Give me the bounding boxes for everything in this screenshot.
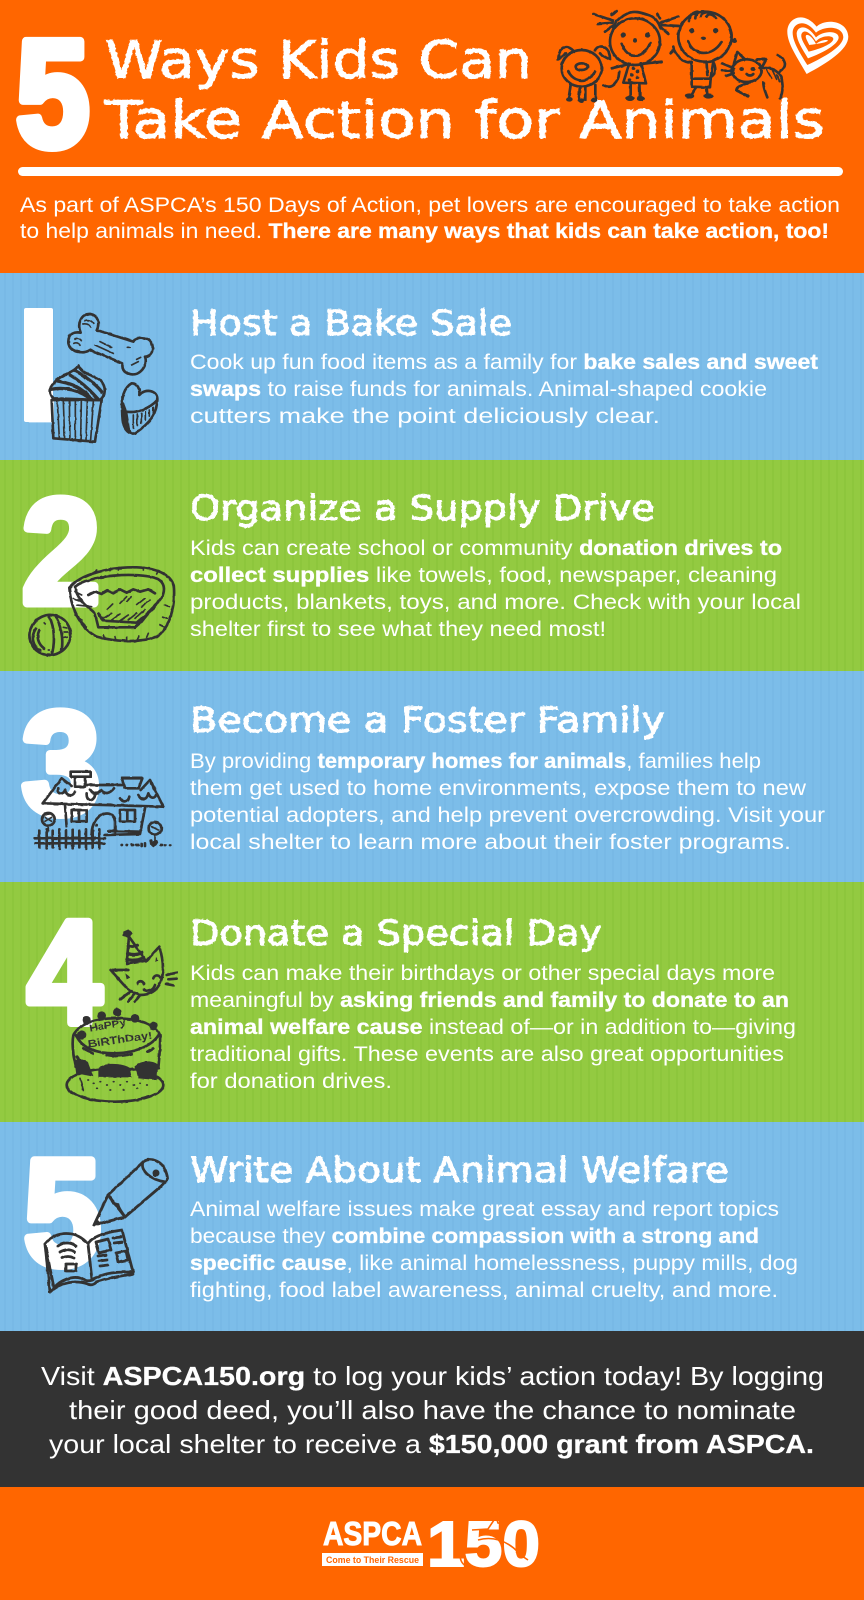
intro text <box>20 194 840 243</box>
body text: animal welfare cause instead of—or in addition to—giving <box>190 1015 796 1039</box>
body text <box>190 961 796 1093</box>
body text: cutters make the point deliciously clear. <box>190 404 660 428</box>
panel: call to action <box>0 1331 864 1487</box>
big number 5: 5 <box>16 9 89 179</box>
body text: swaps to raise funds for animals. Animal-shaped cookie <box>190 377 767 401</box>
dog bed <box>69 567 174 641</box>
body text: local shelter to learn more about their foster programs. <box>190 830 791 854</box>
call to action text: their good deed, you’ll also have the chance to nominate <box>69 1395 796 1425</box>
ball <box>23 608 77 662</box>
logo: ASPCA: Come to Their Rescue <box>326 1555 419 1566</box>
call to action text: your local shelter to receive a $150,000 grant from ASPCA. <box>49 1429 814 1459</box>
bone <box>68 314 153 374</box>
logo: ASPCA: ASPCA <box>323 1515 422 1552</box>
girl <box>593 11 679 101</box>
illustration: kids with pets <box>558 11 785 103</box>
heading: Organize a Supply Drive <box>190 489 655 529</box>
body text: potential adopters, and help prevent overcrowding. Visit your <box>190 803 825 827</box>
logo: 150: 150 <box>427 1508 540 1580</box>
intro text: As part of ASPCA’s 150 Days of Action, pet lovers are encouraged to take action <box>20 194 840 217</box>
cake: HaPPy <box>89 1017 127 1035</box>
panel: host a bake sale <box>0 273 864 460</box>
body text: Kids can make their birthdays or other special days more <box>190 961 775 985</box>
title: Take Action for Animals <box>104 91 825 151</box>
heading: Donate a Special Day <box>190 914 602 954</box>
icon: pencil <box>92 1160 168 1226</box>
body text: fighting, food label awareness, animal cruelty, and more. <box>190 1278 778 1302</box>
panel: organize a supply drive <box>0 460 864 671</box>
number 2: 2 <box>22 468 100 635</box>
body text: them get used to home environments, expose them to new <box>190 776 807 800</box>
body text: Cook up fun food items as a family for bake sales and sweet <box>190 350 818 374</box>
body text: Kids can create school or community donation drives to <box>190 536 782 560</box>
body text <box>190 350 818 428</box>
icon: cat with party hat and cake <box>67 929 177 1102</box>
logo: ASPCA <box>322 1515 423 1566</box>
cupcake <box>50 365 105 442</box>
icon: house <box>35 772 170 848</box>
header panel <box>0 0 864 273</box>
number 5: 5 <box>24 1129 101 1296</box>
number 3: 3 <box>22 683 100 845</box>
body text: shelter first to see what they need most! <box>190 617 606 641</box>
cake <box>67 1008 163 1102</box>
body text: specific cause , like animal homelessness, puppy mills, dog <box>190 1251 798 1275</box>
call to action text <box>41 1361 824 1459</box>
number 1: 1 <box>26 287 54 449</box>
icon: open book <box>45 1230 133 1292</box>
body text: products, blankets, toys, and more. Check with your local <box>190 590 801 614</box>
title: Ways Kids Can <box>105 31 532 91</box>
call to action text: Visit ASPCA150.org to log your kids’ action today! By logging <box>41 1361 824 1391</box>
body text: By providing temporary homes for animals , families help <box>190 749 761 773</box>
body text: meaningful by asking friends and family to donate to an <box>190 988 789 1012</box>
panel: write about animal welfare <box>0 1122 864 1331</box>
divider <box>18 167 843 176</box>
cake: BiRThDay! <box>87 1030 153 1051</box>
heading: Write About Animal Welfare <box>190 1151 729 1191</box>
body text: collect supplies like towels, food, newspaper, cleaning <box>190 563 777 587</box>
icon: bone, cupcake, heart cookie <box>50 314 157 442</box>
panel: donate a special day <box>0 882 864 1122</box>
icon: heart <box>787 17 848 74</box>
cat <box>722 52 785 98</box>
body text: Animal welfare issues make great essay and report topics <box>190 1197 779 1221</box>
intro text: to help animals in need. There are many ways that kids can take action, too! <box>20 220 829 243</box>
body text: traditional gifts. These events are also great opportunities <box>190 1042 784 1066</box>
title <box>104 31 825 151</box>
dog <box>558 47 619 103</box>
body text <box>190 749 825 854</box>
heart cookie <box>122 383 157 434</box>
panel: become a foster family <box>0 671 864 882</box>
boy <box>671 11 737 99</box>
icon: dog bed and ball <box>23 567 174 662</box>
body text <box>190 1197 798 1302</box>
body text <box>190 536 801 641</box>
panel: footer logo <box>0 1487 864 1600</box>
cat with hat <box>111 929 177 1002</box>
heading: Host a Bake Sale <box>190 304 512 344</box>
number 4: 4 <box>28 891 101 1054</box>
heading: Become a Foster Family <box>190 701 665 741</box>
body text: because they combine compassion with a strong and <box>190 1224 759 1248</box>
body text: for donation drives. <box>190 1069 392 1093</box>
